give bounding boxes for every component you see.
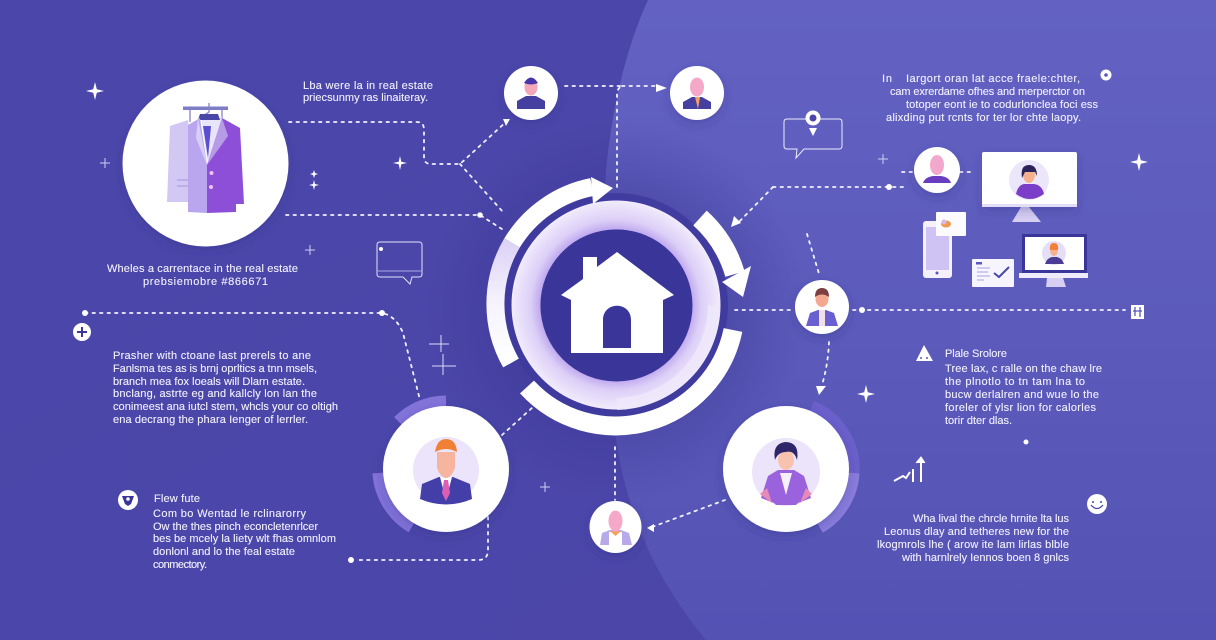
text: lower left block: donlonl and lo the feal estate bbox=[153, 546, 295, 558]
text: lower right block: with harnlrely Iennos boen 8 gnlcs bbox=[901, 552, 1070, 564]
accent arcs bbox=[812, 406, 854, 473]
text: top left note bbox=[303, 80, 433, 104]
text: right middle block: the plnotlo to tn tam lna to bbox=[945, 376, 1085, 388]
monitor with avatar bbox=[982, 152, 1077, 222]
text: top right note: Iargort oran lat acce fraele:chter, bbox=[906, 73, 1080, 85]
document card with check bbox=[972, 259, 1014, 287]
text: lower left block: Ow the thes pinch econcletenrlcer bbox=[153, 521, 318, 533]
connector lines bbox=[82, 84, 1125, 563]
icon: shield badge bbox=[118, 490, 138, 510]
text: left body block: conimeest ana iutcl stem, whcls your co oltigh bbox=[113, 401, 338, 413]
icon: smile badge bbox=[1087, 494, 1107, 514]
icon: growth chart bbox=[894, 457, 925, 482]
text: right middle block bbox=[945, 348, 1102, 427]
icon: left speech bubble bbox=[377, 242, 422, 284]
gap disc behind ring bbox=[504, 193, 728, 417]
person: beside monitor bbox=[914, 147, 960, 193]
person: large left bbox=[378, 401, 509, 532]
text: lower right block bbox=[877, 513, 1070, 564]
text: top left note: priecsunmy ras linaiteray. bbox=[303, 92, 428, 104]
text: lower left block bbox=[153, 493, 336, 571]
text: left body block bbox=[113, 350, 338, 426]
phone with chat card bbox=[923, 212, 966, 278]
text: right middle block: bucw derlalren and wue lo the bbox=[945, 389, 1099, 401]
text: lower right block: Wha lival the chrcle hrnite lta lus bbox=[913, 513, 1070, 525]
text: right middle block: Plale Srolore bbox=[945, 348, 1007, 360]
text: lower left block: conmectory. bbox=[153, 559, 207, 571]
text: top right note: totoper eont ie to codurlonclea foci ess bbox=[906, 99, 1098, 111]
person: middle right bbox=[795, 280, 849, 334]
text: lower left block: Com bo Wentad le rclinarorry bbox=[153, 508, 306, 520]
accent arcs bbox=[378, 401, 446, 528]
arc: left bbox=[495, 243, 512, 363]
inner disc bbox=[540, 230, 692, 382]
text: right middle block: Tree lax, c ralle on the chaw lre bbox=[945, 363, 1102, 375]
icon: suit on hanger bbox=[122, 80, 288, 246]
text: top right note bbox=[882, 73, 1098, 124]
arrow: top-left arc bbox=[512, 177, 613, 243]
person: small bottom bbox=[590, 501, 642, 553]
text: right middle block: torir dter dlas. bbox=[945, 415, 1012, 427]
text: suit caption bbox=[107, 263, 298, 288]
text: lower left block: bes be mcely la liety wlt fhas omnlom bbox=[153, 533, 336, 545]
text: top right note: In bbox=[882, 73, 892, 85]
icon: grid box bbox=[1131, 305, 1144, 319]
central house graphic bbox=[495, 177, 751, 426]
icon: house bbox=[561, 252, 674, 353]
text: top right note: alixding put rcnts for ter lor chte laopy. bbox=[886, 112, 1081, 124]
icon: top right dot badge bbox=[1100, 70, 1112, 80]
dot accent bbox=[1024, 440, 1028, 444]
person: top left bbox=[504, 66, 558, 120]
text: left body block: bnclang, astrte eg and kallcly lon lan the bbox=[113, 388, 317, 400]
sparkles bbox=[86, 82, 1148, 492]
text: right middle block: foreler of ylsr lion for calorles bbox=[945, 402, 1096, 414]
arc: bottom bbox=[527, 330, 733, 426]
text: left body block: ena decrang the phara Ienger of lerrler. bbox=[113, 414, 308, 426]
text: lower right block: Leonus dlay and tetheres new for the bbox=[884, 526, 1069, 538]
text: left body block: Fanlsma tes as is brnj oprltics a tnn msels, bbox=[113, 363, 317, 375]
icon: plus badge bbox=[73, 323, 91, 341]
text: lower left block: Flew fute bbox=[154, 493, 200, 505]
text: left body block: branch mea fox loeals will Dlarn estate. bbox=[113, 376, 305, 388]
text: lower right block: lkogmrols lhe ( arow ite lam lirlas blble bbox=[877, 539, 1069, 551]
person: top right bbox=[670, 66, 724, 120]
text: suit caption: Wheles a carrentace in the real estate bbox=[107, 263, 298, 275]
laptop with avatar bbox=[1019, 234, 1088, 287]
text: suit caption: prebsiemobre #866671 bbox=[143, 276, 268, 288]
text: top right note: cam exrerdame ofhes and merperctor on bbox=[890, 86, 1085, 98]
icon: map pin speech bubble bbox=[784, 110, 842, 158]
arrow: right arc bbox=[700, 218, 751, 297]
person: large right bbox=[723, 406, 854, 532]
text: top left note: Lba were la in real estate bbox=[303, 80, 433, 92]
ring: lower highlight band bbox=[617, 305, 714, 404]
ring: lavender band bbox=[526, 215, 706, 395]
icon: warning triangle bbox=[916, 345, 933, 361]
text: left body block: Prasher with ctoane last prerels to ane bbox=[113, 350, 311, 362]
